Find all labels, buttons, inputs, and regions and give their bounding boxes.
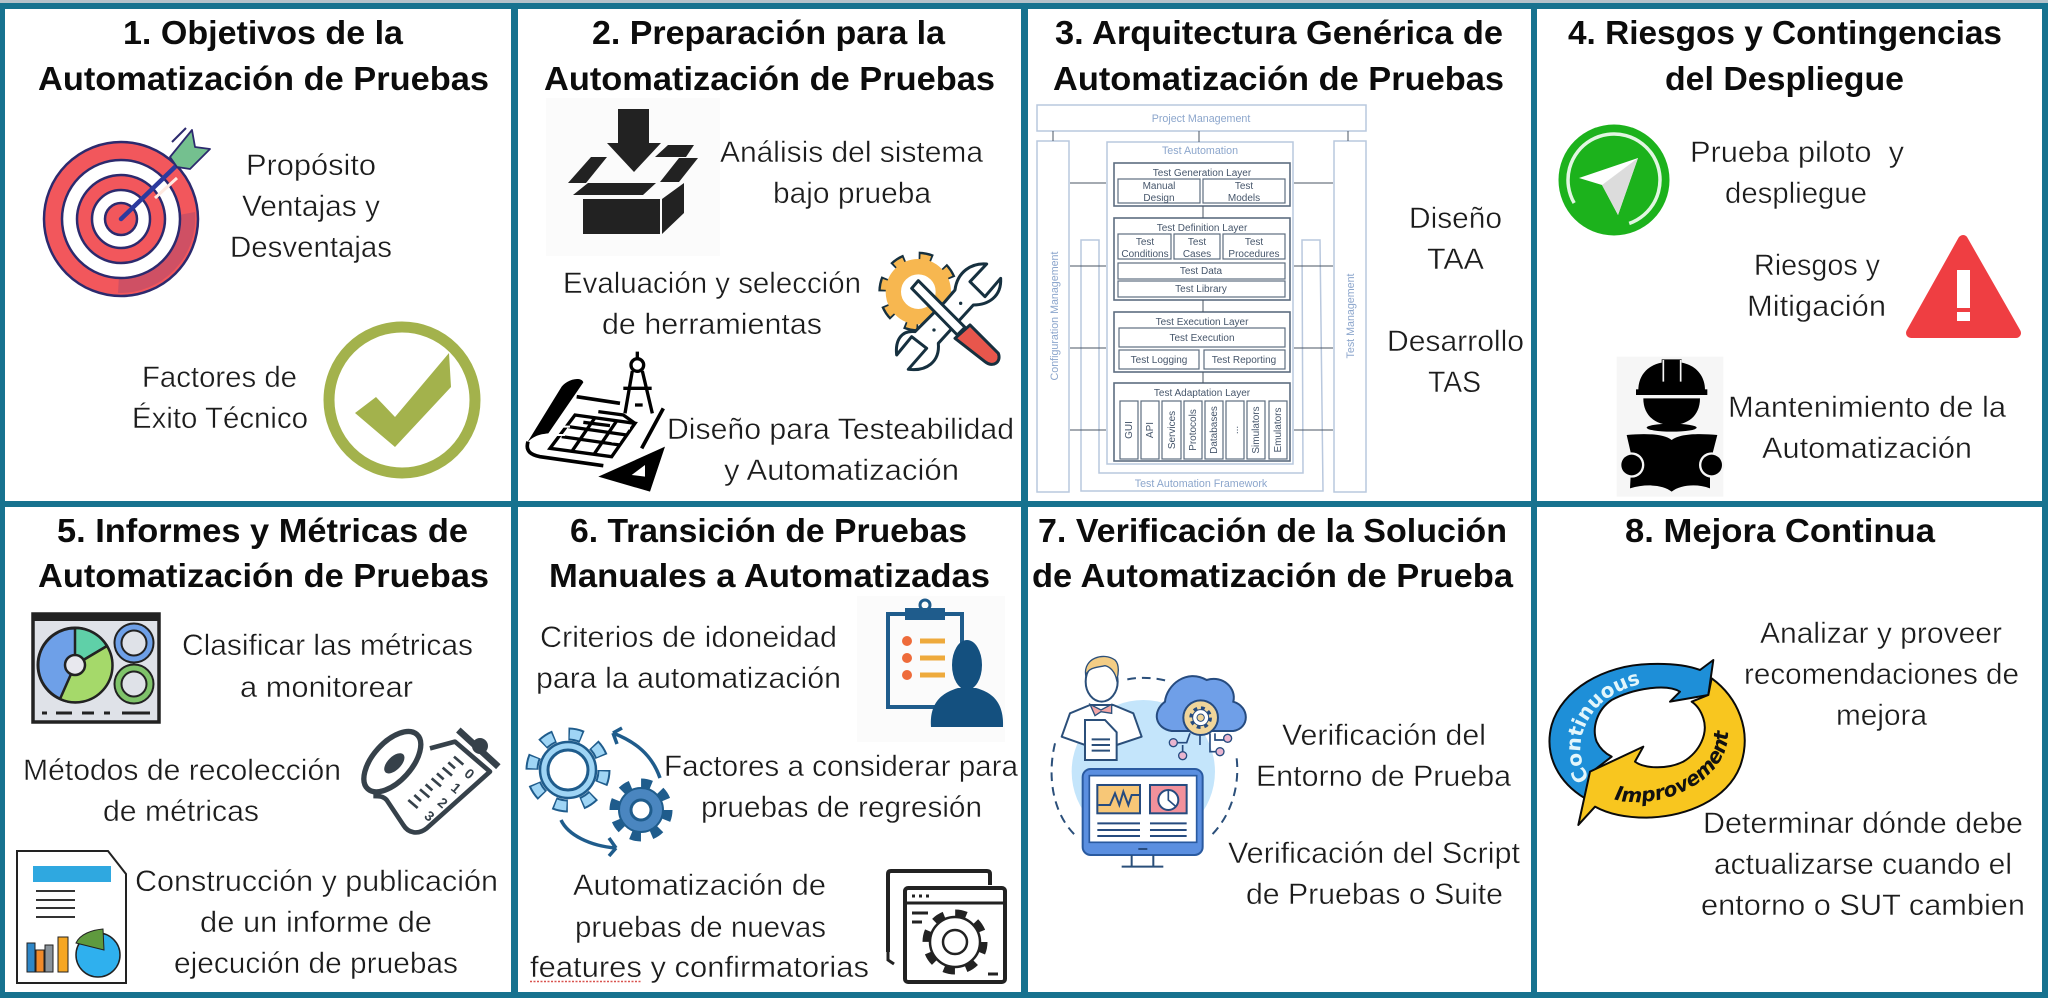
text: criterios de idoneidad: Criterios de idoneidad — [540, 621, 837, 654]
text: factores a considerar: pruebas de regresión — [701, 791, 982, 824]
icon: engineer reading — [1617, 357, 1724, 497]
icon: continuous improvement cycle: Continuous — [1568, 674, 1640, 782]
text: analizar y proveer — [1744, 617, 2019, 732]
test execution layer: Test Execution — [1169, 333, 1235, 344]
test definition layer — [1114, 218, 1290, 300]
heading 2 — [544, 14, 995, 97]
panel 2: preparación — [518, 9, 1021, 501]
icon: target with arrow — [44, 128, 210, 296]
text: determinar dónde debe actualizarse: entorno o SUT cambien — [1701, 889, 2025, 922]
test definition layer: Test Library — [1175, 284, 1227, 295]
text: desarrollo tas — [1387, 325, 1524, 399]
text: prueba piloto — [1690, 136, 1904, 210]
heading 2: Automatización de Pruebas — [544, 60, 995, 97]
text: verificación del script: de Pruebas o Suite — [1246, 878, 1503, 911]
test automation framework frame: Test Automation Framework — [1135, 478, 1268, 490]
heading 4 — [1568, 14, 2002, 97]
test execution layer: Test Reporting — [1212, 355, 1276, 366]
heading 3: Automatización de Pruebas — [1053, 60, 1504, 97]
test execution layer: Test Execution Layer — [1156, 317, 1249, 328]
icon: measuring tape: 1 — [448, 779, 464, 797]
text: criterios de idoneidad — [536, 621, 841, 695]
heading 7: 7. Verificación de la Solución — [1038, 512, 1507, 549]
test adaptation layer: GUI — [1124, 421, 1135, 439]
text: clasificar las métricas: a monitorear — [240, 671, 413, 704]
icon: dashboard window — [33, 614, 159, 722]
project management bar — [1037, 105, 1366, 131]
configuration management column: Configuration Management — [1049, 252, 1061, 380]
text: factores de éxito técnico: Éxito Técnico — [132, 402, 308, 435]
test definition layer: Test — [1245, 237, 1263, 248]
icon: check mark in circle — [329, 327, 475, 473]
heading 4: 4. Riesgos y Contingencias — [1568, 14, 2002, 51]
icon: blueprint with compass and set square — [527, 352, 665, 492]
text: factores a considerar — [664, 750, 1018, 824]
text: métodos de recolección: de métricas — [103, 795, 259, 828]
text: verificación del entorno: Entorno de Prueba — [1256, 760, 1511, 793]
panel 6: transición — [518, 507, 1021, 992]
test adaptation layer: Protocols — [1188, 409, 1199, 451]
test adaptation layer — [1114, 383, 1290, 461]
text: diseño taa: TAA — [1427, 243, 1484, 276]
text: automatización de pruebas de nuevas features: pruebas de nuevas — [575, 911, 826, 944]
test definition layer: Test Definition Layer — [1157, 223, 1248, 234]
test management column — [1334, 141, 1366, 492]
heading 6: Manuales a Automatizadas — [549, 557, 990, 594]
test definition layer: Procedures — [1228, 249, 1280, 260]
text: construcción y publicación: de un informe de — [200, 906, 432, 939]
test adaptation layer: Databases — [1209, 406, 1220, 454]
test generation layer: Manual — [1143, 181, 1175, 192]
text: analizar y proveer: recomendaciones de — [1744, 658, 2019, 691]
heading 6: 6. Transición de Pruebas — [570, 512, 967, 549]
text: determinar dónde debe actualizarse: actualizarse cuando el — [1714, 848, 2012, 881]
icon: tester, cloud and monitor — [1052, 656, 1246, 867]
heading 1: Automatización de Pruebas — [38, 60, 489, 97]
test execution layer: Test Logging — [1131, 355, 1187, 366]
text: desarrollo tas: Desarrollo — [1387, 325, 1524, 358]
text: construcción y publicación: ejecución de pruebas — [174, 947, 458, 980]
icon: windows with gear — [888, 871, 1005, 982]
text: factores de éxito técnico: Factores de — [142, 361, 297, 394]
project management bar: Project Management — [1152, 113, 1250, 125]
text: criterios de idoneidad: para la automatización — [536, 662, 841, 695]
test generation layer — [1114, 163, 1290, 206]
icon: clipboard and person — [857, 596, 1005, 742]
test adaptation layer: API — [1145, 422, 1156, 438]
configuration management column — [1037, 141, 1069, 492]
icon: measuring tape: 3 — [421, 807, 438, 825]
text: diseño taa — [1409, 202, 1502, 276]
text: propósito, ventajas y desventajas: Ventajas y — [242, 190, 380, 223]
text: riesgos y mitigación: Riesgos y — [1754, 249, 1880, 282]
heading 1 — [38, 14, 489, 97]
test execution layer — [1114, 312, 1290, 372]
icon: box with down arrow — [546, 98, 720, 256]
heading 3: 3. Arquitectura Genérica de — [1055, 14, 1503, 51]
text: verificación del entorno — [1256, 719, 1511, 793]
test adaptation layer: Services — [1167, 411, 1178, 449]
text: prueba piloto: Prueba piloto y — [1690, 136, 1904, 169]
text: determinar dónde debe actualizarse — [1701, 807, 2025, 922]
panel 5: informes y métricas — [5, 507, 511, 992]
test generation layer: Test Generation Layer — [1153, 168, 1252, 179]
icon: gears with cycle arrows — [532, 728, 667, 856]
text: análisis del sistema: Análisis del sistema — [720, 136, 983, 169]
icon: measuring tape — [353, 721, 498, 832]
panel 1: objetivos — [5, 9, 511, 501]
icon: measuring tape: 0 — [461, 765, 478, 782]
test definition layer: Test Data — [1180, 266, 1223, 277]
test generation layer: Test — [1235, 181, 1253, 192]
text: determinar dónde debe actualizarse: Determinar dónde debe — [1703, 807, 2023, 840]
test automation frame — [1107, 142, 1293, 464]
text: verificación del script: Verificación del Script — [1228, 837, 1521, 870]
panel 4: riesgos — [1537, 9, 2042, 501]
text: propósito, ventajas y desventajas: Desventajas — [230, 231, 392, 264]
connector arrows — [1053, 131, 1348, 430]
text: construcción y publicación — [135, 865, 498, 980]
text: análisis del sistema — [720, 136, 983, 210]
test definition layer: Cases — [1183, 249, 1211, 260]
text: análisis del sistema: bajo prueba — [773, 177, 931, 210]
heading 5 — [38, 512, 489, 594]
heading 7 — [1032, 512, 1514, 594]
text: analizar y proveer: mejora — [1836, 699, 1927, 732]
heading 5: Automatización de Pruebas — [38, 557, 489, 594]
text: automatización de pruebas de nuevas features: Automatización de — [573, 869, 826, 902]
text: métodos de recolección: Métodos de recolección — [23, 754, 341, 787]
icon: report with charts — [17, 851, 126, 983]
heading 6 — [549, 512, 990, 594]
icon: warning triangle — [1911, 240, 2016, 333]
text: automatización de pruebas de nuevas features: features y confirmatorias — [530, 951, 869, 984]
text: evaluación de herramientas: Evaluación y selección — [563, 267, 861, 300]
text: diseño taa: Diseño — [1409, 202, 1502, 235]
text: factores de éxito técnico — [132, 361, 308, 435]
test adaptation layer: Test Adaptation Layer — [1154, 388, 1251, 399]
heading 1: 1. Objetivos de la — [123, 14, 404, 51]
text: mantenimiento — [1728, 391, 2006, 465]
text: métodos de recolección — [23, 754, 341, 828]
heading 5: 5. Informes y Métricas de — [57, 512, 468, 549]
test adaptation layer: Simulators — [1251, 406, 1262, 454]
text: mantenimiento: Automatización — [1762, 432, 1972, 465]
test automation framework frame — [1081, 240, 1323, 491]
test definition layer: Test — [1136, 237, 1154, 248]
text: mantenimiento: Mantenimiento de la — [1728, 391, 2006, 424]
text: clasificar las métricas: Clasificar las métricas — [182, 629, 473, 662]
text: riesgos y mitigación — [1747, 249, 1886, 323]
test automation frame: Test Automation — [1162, 145, 1238, 157]
text: verificación del entorno: Verificación del — [1282, 719, 1486, 752]
heading 8: 8. Mejora Continua — [1625, 512, 1936, 549]
test definition layer: Conditions — [1121, 249, 1169, 260]
text: diseño para testeabilidad: Diseño para Testeabilidad — [667, 413, 1014, 446]
text: propósito, ventajas y desventajas: Propósito — [246, 149, 376, 182]
panel 7: verificación — [1028, 507, 1531, 992]
icon: continuous improvement cycle — [1548, 659, 1746, 826]
test management column: Test Management — [1345, 273, 1357, 358]
text: clasificar las métricas — [182, 629, 473, 704]
text: construcción y publicación: Construcción y publicación — [135, 865, 498, 898]
icon: continuous improvement cycle: Improvement — [1614, 730, 1728, 806]
text: diseño para testeabilidad — [667, 413, 1014, 487]
text: desarrollo tas: TAS — [1428, 366, 1481, 399]
text: analizar y proveer: Analizar y proveer — [1760, 617, 2002, 650]
icon: measuring tape: 2 — [435, 794, 451, 811]
text: riesgos y mitigación: Mitigación — [1747, 290, 1886, 323]
icon: green navigation badge — [1551, 117, 1677, 243]
heading 7: de Automatización de Prueba — [1032, 557, 1514, 594]
heading 2: 2. Preparación para la — [592, 14, 946, 51]
heading 3 — [1053, 14, 1504, 97]
test adaptation layer: Emulators — [1273, 407, 1284, 453]
text: verificación del script — [1228, 837, 1521, 911]
architecture diagram — [1037, 105, 1366, 492]
icon: gear with wrench and screwdriver — [886, 259, 1001, 370]
text: prueba piloto: despliegue — [1725, 177, 1867, 210]
test generation layer: Models — [1228, 193, 1260, 204]
panel 8: mejora continua — [1537, 507, 2042, 992]
text: factores a considerar: Factores a considerar para — [664, 750, 1018, 783]
panel 3: arquitectura — [1028, 9, 1531, 501]
heading 4: del Despliegue — [1665, 60, 1904, 97]
text: evaluación de herramientas — [563, 267, 861, 341]
test generation layer: Design — [1143, 193, 1175, 204]
text: evaluación de herramientas: de herramientas — [602, 308, 822, 341]
text: propósito, ventajas y desventajas — [230, 149, 392, 264]
text: automatización de pruebas de nuevas features — [530, 869, 869, 984]
test adaptation layer: ... — [1230, 426, 1241, 434]
test definition layer: Test — [1188, 237, 1206, 248]
text: diseño para testeabilidad: y Automatización — [724, 454, 959, 487]
